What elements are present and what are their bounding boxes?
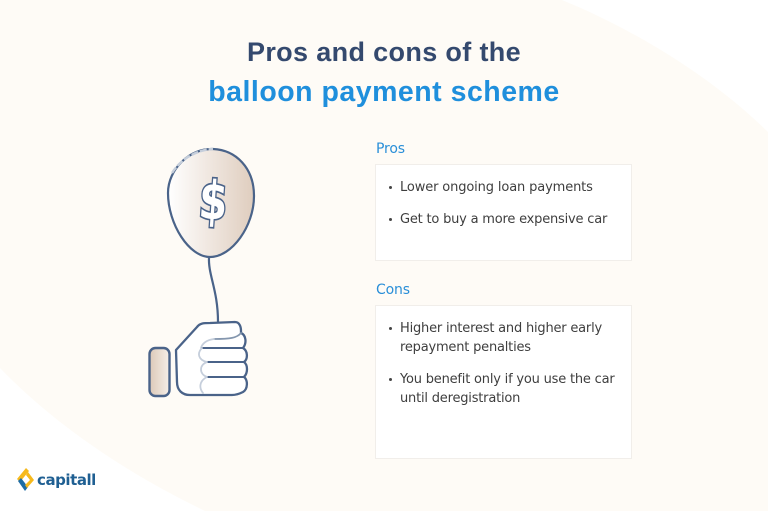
cons item 2: You benefit only if you use the car (400, 372, 614, 387)
cons item 2 (389, 372, 615, 406)
panel: pros (375, 164, 632, 261)
hand (176, 322, 247, 395)
logo: capitall (17, 468, 96, 491)
heading: pros: Pros (376, 141, 405, 157)
icon: dollar sign: $ (197, 170, 230, 233)
title (208, 37, 560, 108)
cons item 1 (389, 321, 602, 355)
logo wordmark: capitall (37, 471, 96, 489)
icon: logo diamond (17, 468, 34, 491)
balloon (168, 149, 254, 257)
balloon string (209, 257, 218, 322)
panel: cons (375, 305, 632, 459)
heading: cons: Cons (376, 282, 410, 298)
sleeve (150, 348, 170, 396)
cons item 1: Higher interest and higher early (400, 321, 602, 336)
title line 2: balloon payment scheme (208, 76, 560, 108)
icon: balloon held by a hand (148, 148, 256, 398)
pros item 1: Lower ongoing loan payments (400, 180, 593, 195)
pros item 2: Get to buy a more expensive car (400, 212, 607, 227)
cons item 2: until deregistration (400, 391, 520, 406)
title line 1: Pros and cons of the (247, 37, 521, 67)
cons item 1: repayment penalties (400, 340, 531, 355)
